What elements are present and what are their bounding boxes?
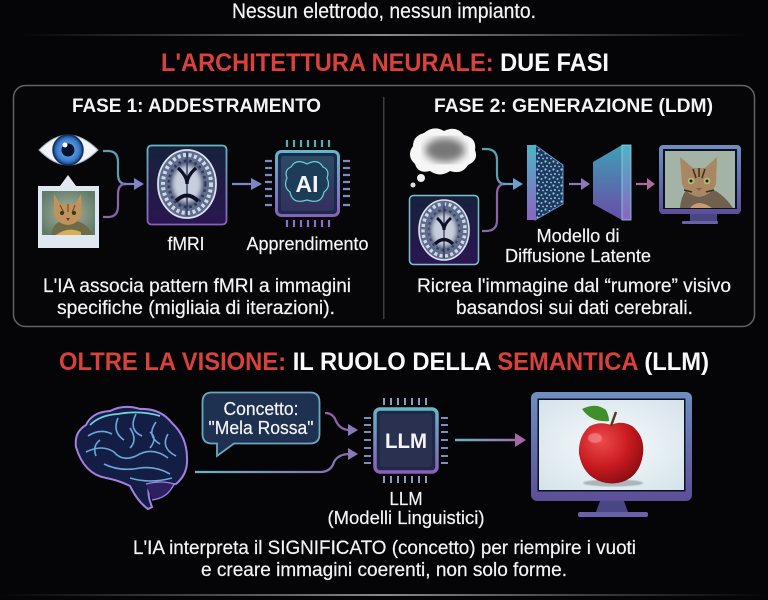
- text: fase 1 description: L'IA associa pattern fMRI a immagini: [43, 276, 351, 297]
- icon: eye: [39, 135, 98, 165]
- heading: fase 1: FASE 1: ADDESTRAMENTO: [72, 96, 321, 117]
- text: semantic description: e creare immagini coerenti, non solo forme.: [201, 560, 567, 581]
- icon: decoder panel: [593, 145, 631, 220]
- icon: cat polaroid: [38, 175, 99, 248]
- label: LLM modelli linguistici: [328, 489, 484, 528]
- label: modello di diffusione latente: Modello di: [536, 225, 620, 246]
- icon: thought cloud: [410, 128, 476, 188]
- arrow: decoder to monitor: [636, 178, 655, 190]
- heading: architettura neurale: L'ARCHITETTURA NEURALE: DUE FASI: [161, 49, 609, 77]
- label: LLM modelli linguistici: LLM: [390, 489, 422, 509]
- text: semantic description: L'IA interpreta il SIGNIFICATO (concetto) per riempire i vuoti: [133, 538, 636, 559]
- arrow: eye and photo to fMRI: [103, 151, 144, 217]
- panel: due fasi: [14, 86, 754, 326]
- text: fase 1 description: specifiche (migliaia di iterazioni).: [57, 298, 335, 319]
- label: modello di diffusione latente: Diffusione Latente: [505, 245, 651, 266]
- icon: AI chip: [265, 140, 350, 227]
- heading: oltre la visione: OLTRE LA VISIONE: IL RUOLO DELLA SEMANTICA (LLM): [59, 348, 709, 376]
- callout: concetto mela rossa: Concetto:: [224, 399, 298, 419]
- icon: glowing brain: [76, 407, 187, 509]
- arrow: brain to LLM: [195, 448, 358, 472]
- icon: monitor with cat: [659, 145, 741, 224]
- label: LLM modelli linguistici: (Modelli Linguistici): [328, 508, 484, 528]
- label: fMRI: fMRI: [168, 234, 204, 254]
- text: fase 2 description: basandosi sui dati cerebrali.: [456, 298, 693, 319]
- icon: monitor with apple: [531, 392, 692, 517]
- arrow: fMRI to AI: [232, 178, 262, 190]
- arrow: LLM to monitor: [455, 433, 526, 447]
- arrow: concept to LLM: [325, 413, 358, 436]
- heading: fase 2: FASE 2: GENERAZIONE (LDM): [434, 96, 713, 117]
- label: apprendimento: Apprendimento: [246, 233, 368, 254]
- arrow: noise to decoder: [569, 178, 590, 190]
- icon: fMRI scan: [148, 146, 226, 224]
- callout: concetto mela rossa: [202, 392, 320, 456]
- icon: brain scan: [410, 196, 478, 264]
- icon: LLM chip: [364, 398, 448, 483]
- icon: AI chip: AI: [296, 171, 318, 197]
- icon: LLM chip: LLM: [385, 430, 427, 453]
- text: fase 2 description: [417, 276, 731, 319]
- callout: concetto mela rossa: "Mela Rossa": [208, 418, 314, 438]
- text: fase 1 description: [43, 276, 351, 319]
- label: modello di diffusione latente: [505, 225, 651, 266]
- subtitle: Nessun elettrodo, nessun impianto.: [232, 0, 536, 23]
- text: semantic description: [133, 538, 636, 581]
- arrow: cloud and scan to diffusion: [482, 149, 523, 231]
- text: fase 2 description: Ricrea l'immagine dal “rumore” visivo: [417, 276, 731, 297]
- icon: latent noise panel: [527, 145, 563, 220]
